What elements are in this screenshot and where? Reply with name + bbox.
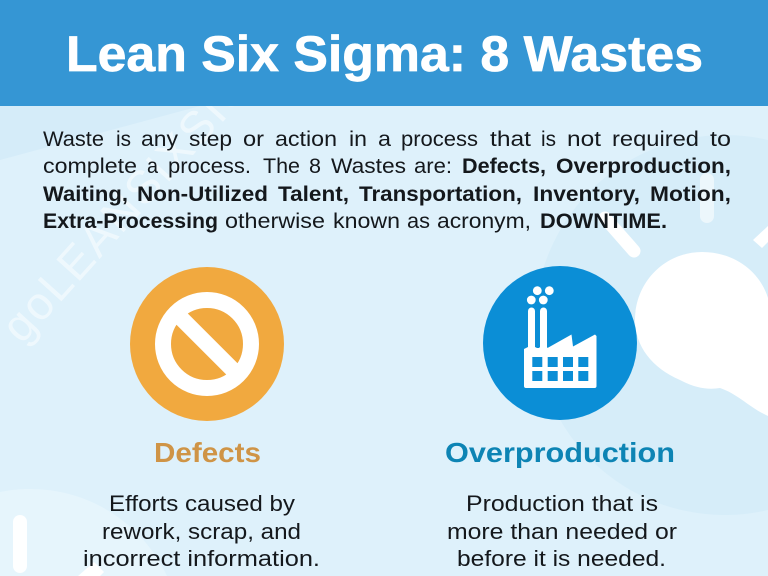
intro text block: that xyxy=(490,128,531,151)
background panel with faint decoration: goLEANSIXSIGMA xyxy=(0,3,312,352)
intro text block: Waste xyxy=(43,128,104,151)
intro text block: known xyxy=(333,210,400,233)
intro text block: otherwise xyxy=(225,210,325,233)
intro text block: Wastes xyxy=(331,155,406,178)
header band xyxy=(0,0,768,106)
intro text block: Extra-Processing xyxy=(43,210,218,233)
intro text block: to xyxy=(710,128,731,151)
intro text block xyxy=(43,128,731,233)
icon: overproduction factory xyxy=(483,266,637,420)
intro text block: Defects, xyxy=(462,155,546,178)
heading: overproduction: Overproduction xyxy=(445,437,675,468)
text block: overproduction description: Production that is xyxy=(466,491,658,516)
intro text block: or xyxy=(243,128,264,151)
intro text block: any xyxy=(141,128,179,151)
intro text block: step xyxy=(189,128,232,151)
intro text block: action xyxy=(275,128,337,151)
icon: light bulb watermark xyxy=(635,252,768,416)
title: Lean Six Sigma: 8 Wastes xyxy=(66,26,703,82)
text block: defects description: incorrect information. xyxy=(83,546,320,571)
intro text block: is xyxy=(541,128,556,151)
intro text block: Overproduction, xyxy=(556,155,731,178)
intro text block: not xyxy=(567,128,601,151)
intro text block: process. xyxy=(168,155,251,178)
intro text block: is xyxy=(116,128,131,151)
text block: overproduction description xyxy=(447,491,677,571)
intro text block: DOWNTIME. xyxy=(540,210,667,233)
text block: defects description: Efforts caused by xyxy=(109,491,295,516)
text block: defects description: rework, scrap, and xyxy=(102,519,301,544)
intro text block: Motion, xyxy=(650,183,731,206)
intro text block: The xyxy=(263,155,300,178)
text block: overproduction description: more than needed or xyxy=(447,519,677,544)
text block: defects description xyxy=(83,491,320,571)
intro text block: Waiting, xyxy=(43,183,128,206)
intro text block: a xyxy=(147,155,158,178)
intro text block: required xyxy=(612,128,699,151)
icon: defects prohibition sign xyxy=(130,267,284,421)
intro text block: process xyxy=(401,128,478,151)
heading: defects: Defects xyxy=(154,437,261,468)
intro text block: complete xyxy=(43,155,137,178)
intro text block: are: xyxy=(414,155,452,178)
intro text block: in xyxy=(349,128,367,151)
intro text block: as xyxy=(407,210,430,233)
intro text block: a xyxy=(378,128,391,151)
intro text block: Non-Utilized xyxy=(137,183,268,206)
intro text block: acronym, xyxy=(437,210,531,233)
text block: overproduction description: before it is needed. xyxy=(457,546,666,571)
intro text block: Talent, xyxy=(278,183,349,206)
intro text block: Transportation, xyxy=(359,183,522,206)
intro text block: 8 xyxy=(309,155,321,178)
intro text block: Inventory, xyxy=(533,183,640,206)
